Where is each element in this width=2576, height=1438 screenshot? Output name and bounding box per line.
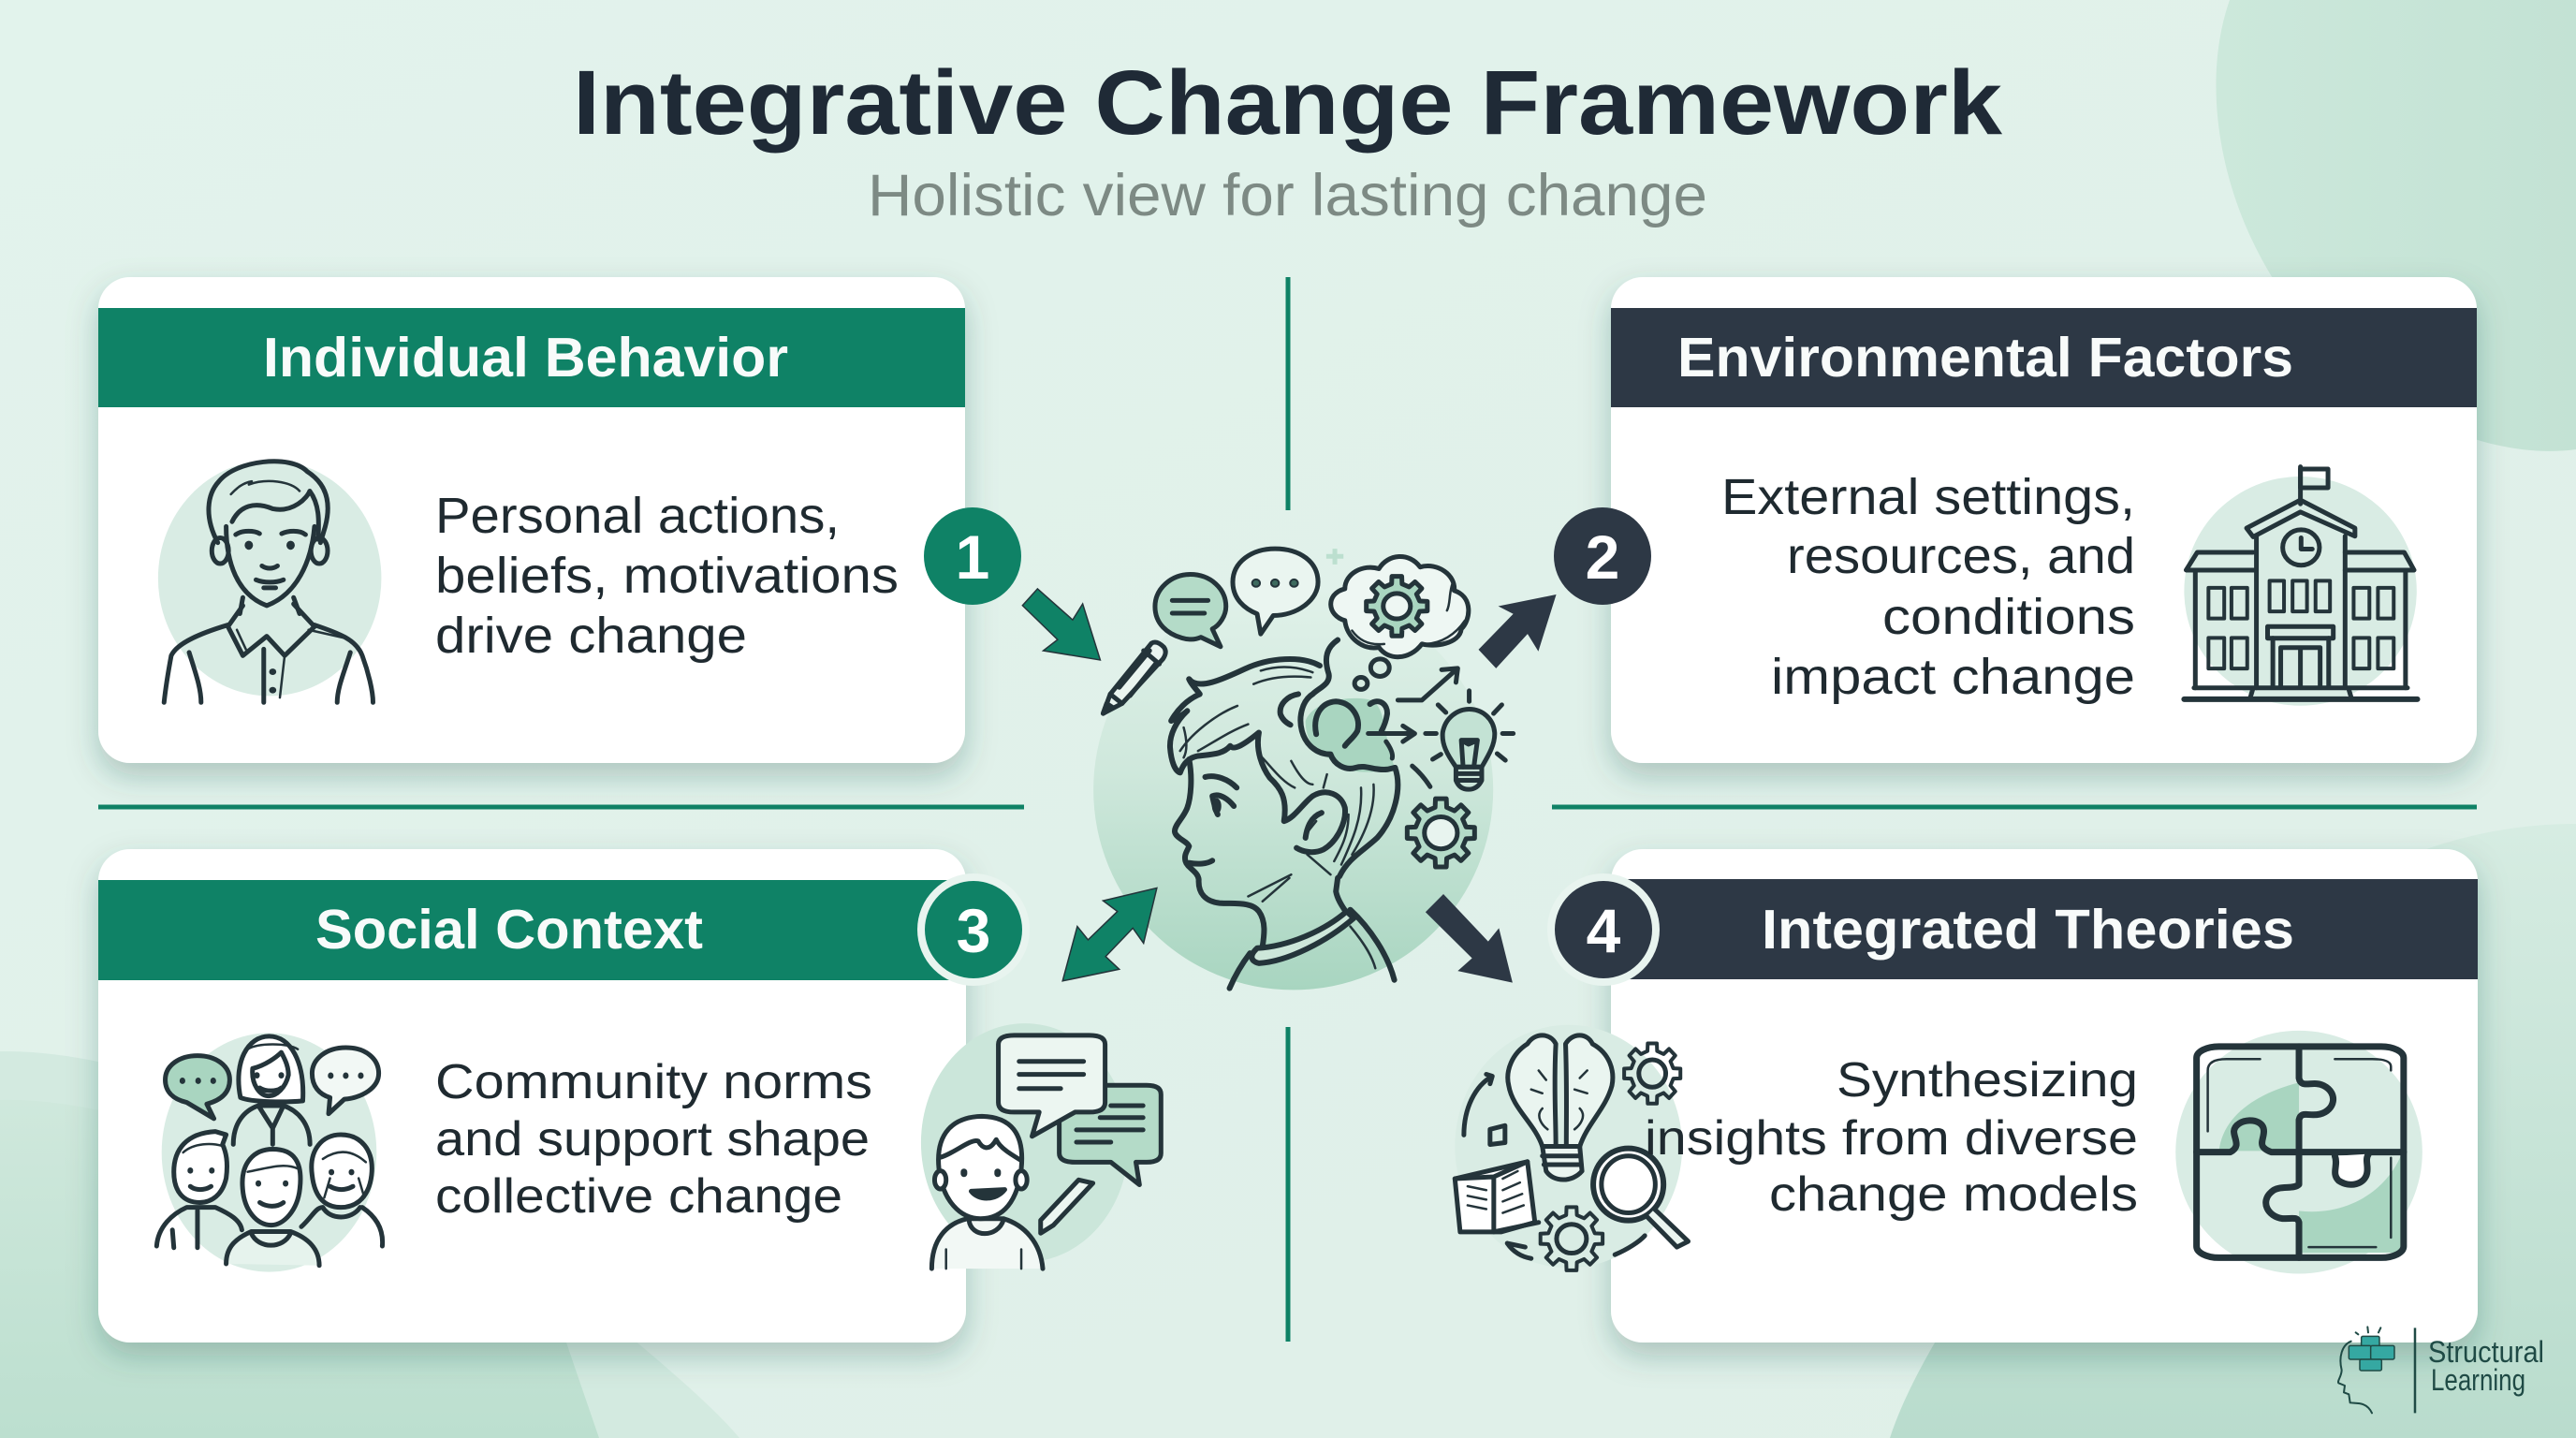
icon: group of people with speech bubbles: [156, 1033, 383, 1272]
divider lines: [98, 277, 2477, 1342]
icon: growth and process arrows: [1368, 668, 1457, 786]
description: environmental factors: [1721, 469, 2135, 705]
panel: individual behavior: [98, 277, 965, 763]
icon: speech bubble with dots: [1233, 549, 1318, 634]
description: integrated theories: insights from diverse: [1645, 1111, 2138, 1166]
arrow: two-way social context: [1062, 888, 1157, 981]
dots inside speech bubble: [1252, 580, 1298, 587]
subtitle: Holistic view for lasting change: [868, 163, 1707, 228]
icon: gear: [1407, 799, 1474, 867]
icon: light green brain patch: [1306, 698, 1395, 772]
description: integrated theories: Synthesizing: [1837, 1053, 2138, 1108]
heading bar: social context: [98, 880, 966, 980]
logo wordmark: Structural: [2428, 1335, 2544, 1369]
description: individual behavior: Personal actions,: [435, 488, 840, 544]
description: individual behavior: drive change: [435, 608, 747, 664]
arrow: individual behaviour to centre: [1022, 589, 1100, 660]
panel: environmental factors: [1611, 277, 2477, 763]
icon: puzzle: [2175, 1031, 2422, 1273]
number badge 1: [924, 507, 1021, 605]
description: integrated theories: change models: [1769, 1167, 2138, 1222]
icon: brain, gears, book and magnifier: [1455, 1025, 1689, 1270]
description: social context: [435, 1055, 872, 1224]
heading text: integrated theories: Integrated Theories: [1762, 899, 2294, 961]
central illustration: child's head with ideas: [1093, 549, 1514, 990]
number badge 2: 2: [1586, 522, 1619, 592]
head outline: [1170, 640, 1398, 989]
icon: light bulb: [1426, 691, 1514, 789]
description: environmental factors: conditions: [1882, 589, 2135, 645]
heading bar: integrated theories: [1619, 879, 2478, 979]
description: social context: collective change: [435, 1169, 842, 1224]
icon: child with speech bubbles and pencil: [921, 1023, 1161, 1269]
heading text: environmental factors: Environmental Factors: [1677, 327, 2293, 389]
number badge 1: 1: [956, 522, 989, 592]
description: environmental factors: impact change: [1771, 649, 2135, 705]
arrow: centre to integrated theories: [1426, 894, 1513, 983]
description: environmental factors: External settings,: [1721, 469, 2135, 525]
icon: person: [158, 461, 381, 702]
icon: thought cloud with gear: [1331, 557, 1469, 689]
number badge 4: [1547, 873, 1660, 986]
icon: plus sparkle: [1326, 549, 1343, 565]
arrow: centre to environmental factors: [1479, 594, 1557, 668]
logo wordmark: Learning: [2431, 1363, 2525, 1397]
central circle: [1093, 590, 1493, 990]
heading text: social context: Social Context: [315, 899, 703, 961]
heading text: individual behavior: Individual Behavior: [263, 327, 788, 389]
panel: integrated theories: [1455, 849, 2478, 1343]
description: social context: Community norms: [435, 1055, 872, 1109]
number badge 3: 3: [957, 896, 990, 965]
description: social context: and support shape: [435, 1112, 870, 1167]
panel: social context: [98, 849, 966, 1343]
heading bar: environmental factors: [1611, 308, 2477, 407]
description: individual behavior: beliefs, motivations: [435, 548, 899, 604]
heading bar: individual behavior: [98, 308, 965, 407]
description: environmental factors: resources, and: [1787, 528, 2135, 584]
icon: school building: [2184, 467, 2418, 706]
description: integrated theories: [1645, 1053, 2138, 1222]
number badge 3: [917, 873, 1030, 986]
logo wordmark: [2428, 1335, 2544, 1397]
icon: speech bubble with lines: [1155, 575, 1226, 647]
description: individual behavior: [435, 488, 899, 664]
number badge 4: 4: [1587, 896, 1621, 965]
logo: Structural Learning: [2338, 1327, 2415, 1413]
title: Integrative Change Framework: [573, 51, 2003, 154]
icon: pencil: [1103, 642, 1165, 713]
number badge 2: [1554, 507, 1651, 605]
